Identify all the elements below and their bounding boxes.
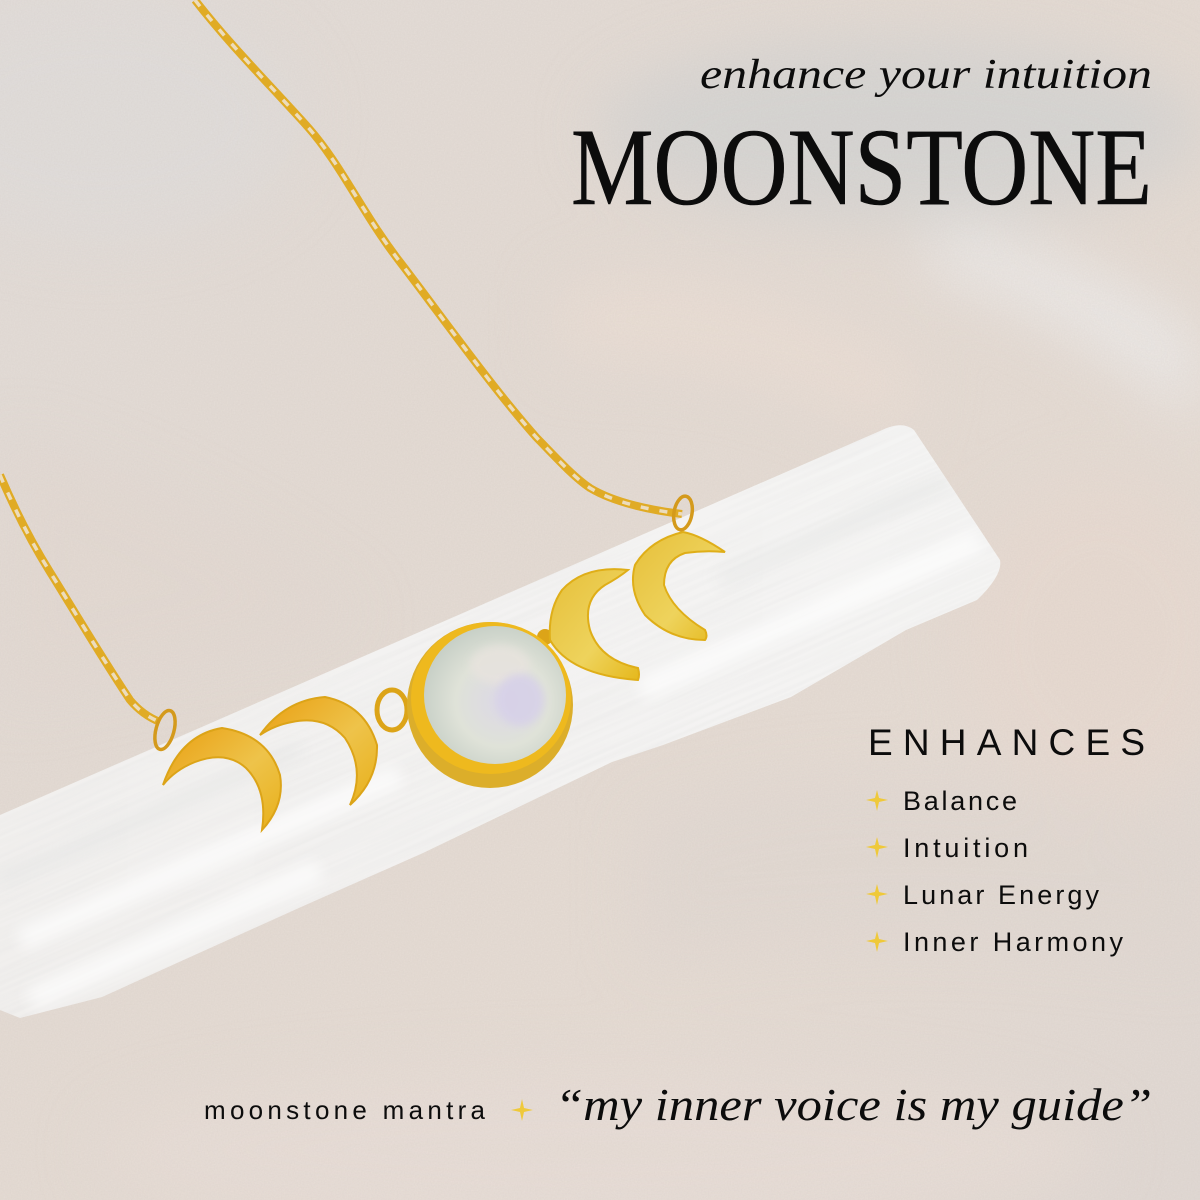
item: inner harmony: Inner Harmony [903,927,1124,957]
icon: star [866,884,888,905]
item: intuition: Intuition [903,833,1028,863]
icon: waning crescent 2 [633,532,725,640]
item: balance: Balance [903,786,1017,816]
icon: star [866,837,888,858]
icon: connector link [537,629,553,645]
icon: full moon moonstone [407,622,573,788]
icon: jump ring right [671,495,695,531]
gold chain: right strand [195,0,695,531]
selenite crystal bar [0,425,1000,1018]
gold chain: left strand [0,475,179,752]
tagline: enhance your intuition [700,52,1152,98]
icon: star [866,790,888,811]
icon: waxing crescent 1 [163,728,281,830]
item: lunar energy: Lunar Energy [903,880,1100,910]
mantra label: moonstone mantra [204,1095,486,1125]
icon: connector ring [377,690,407,730]
pendant: moon phases [163,532,725,830]
icon: star [866,931,888,952]
icon: jump ring left [151,708,179,752]
icon: mantra star [511,1099,533,1121]
panel: enhances list [866,722,1145,957]
icon: waxing crescent 2 [260,697,377,805]
heading: ENHANCES [868,722,1145,763]
mantra quote: “my inner voice is my guide” [555,1079,1152,1130]
icon: waning crescent 1 [550,569,639,680]
